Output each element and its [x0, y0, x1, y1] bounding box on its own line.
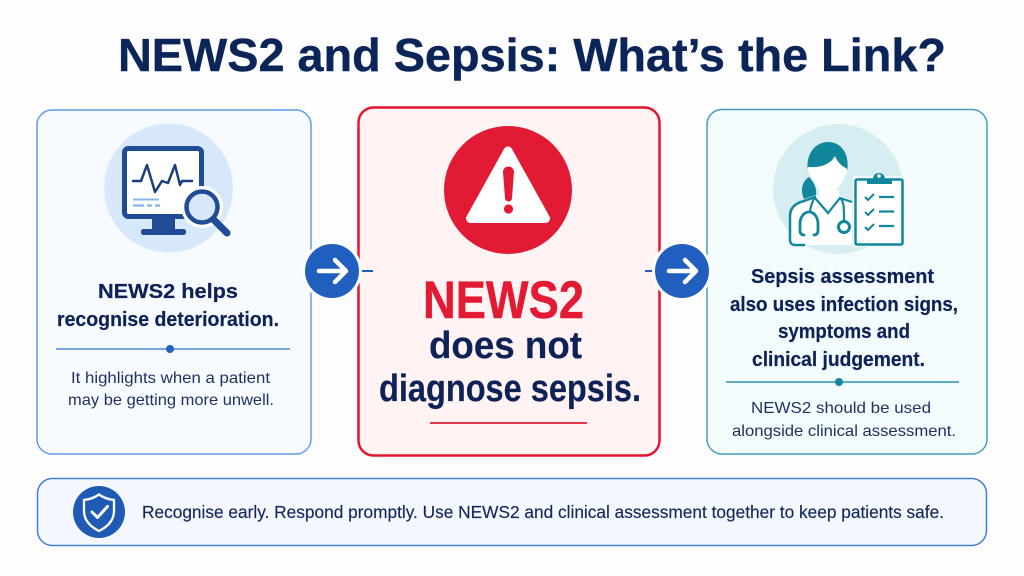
arrow: centre to right: [645, 241, 712, 301]
text: left panel body: may be getting more unwell.: [68, 392, 274, 409]
text: left panel body: It highlights when a patient: [71, 370, 271, 387]
heading: right panel: Sepsis assessment: [751, 266, 934, 288]
heading: right panel: [730, 266, 958, 371]
panel: NEWS2 does not diagnose sepsis: [358, 108, 660, 456]
text: right panel body: [732, 400, 956, 440]
heading: right panel: symptoms and: [778, 321, 910, 343]
panel: sepsis assessment: [707, 110, 987, 454]
icon: monitor with magnifier: [104, 124, 233, 252]
heading: NEWS2: NEWS2: [423, 271, 584, 330]
text: right panel body: alongside clinical assessment.: [732, 423, 956, 440]
text: left panel body: [68, 370, 274, 409]
icon: shield with check: [73, 486, 125, 538]
heading: left panel: recognise deterioration.: [57, 309, 279, 331]
heading: left panel: NEWS2 helps: [98, 281, 238, 303]
arrow: left to centre: [302, 241, 373, 301]
heading: left panel: [57, 281, 279, 331]
icon: warning: [444, 126, 572, 254]
heading: does not diagnose sepsis: diagnose sepsis.: [379, 368, 641, 410]
heading: does not diagnose sepsis: does not: [429, 325, 582, 367]
panel: NEWS2 helps recognise deterioration: [37, 110, 311, 454]
panel: bottom message: [38, 478, 986, 546]
heading: right panel: also uses infection signs,: [730, 294, 958, 316]
title: NEWS2 and Sepsis: What’s the Link?: [118, 29, 946, 81]
icon: clinician with clipboard: [773, 124, 905, 254]
text: bottom message: Recognise early. Respond promptly. Use NEWS2 and clinical assessment together to keep patients safe.: [142, 502, 944, 522]
text: right panel body: NEWS2 should be used: [751, 400, 931, 417]
heading: does not diagnose sepsis: [379, 325, 641, 410]
heading: right panel: clinical judgement.: [752, 349, 925, 371]
